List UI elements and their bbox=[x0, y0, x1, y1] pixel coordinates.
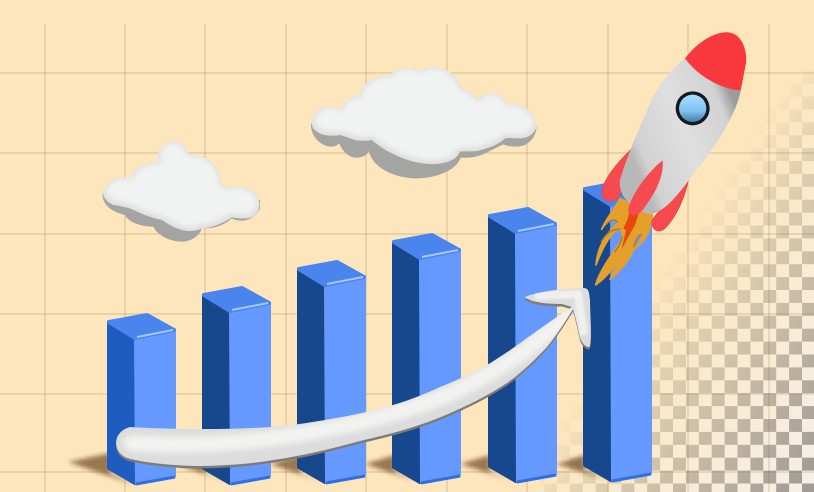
bar 2 bbox=[204, 288, 270, 484]
bar 5 bbox=[490, 209, 556, 482]
growth arrow bbox=[116, 288, 591, 468]
rocket nose bbox=[685, 32, 746, 91]
rocket bbox=[596, 32, 746, 285]
rocket flame bbox=[596, 198, 652, 285]
cloud: small bbox=[103, 142, 260, 242]
bar 3 bbox=[299, 262, 365, 483]
rocket left fin bbox=[602, 148, 632, 201]
cloud: large bbox=[311, 68, 537, 178]
bar floor shadows bbox=[68, 453, 608, 485]
rocket centre fin bbox=[628, 161, 663, 215]
rocket body bbox=[620, 58, 741, 214]
bar 4 bbox=[394, 235, 460, 483]
rocket window bbox=[676, 91, 710, 125]
rocket right fin bbox=[652, 181, 688, 231]
bar 1 bbox=[109, 315, 175, 484]
bar 6 bbox=[585, 182, 651, 481]
transparency checkerboard bbox=[540, 70, 814, 492]
